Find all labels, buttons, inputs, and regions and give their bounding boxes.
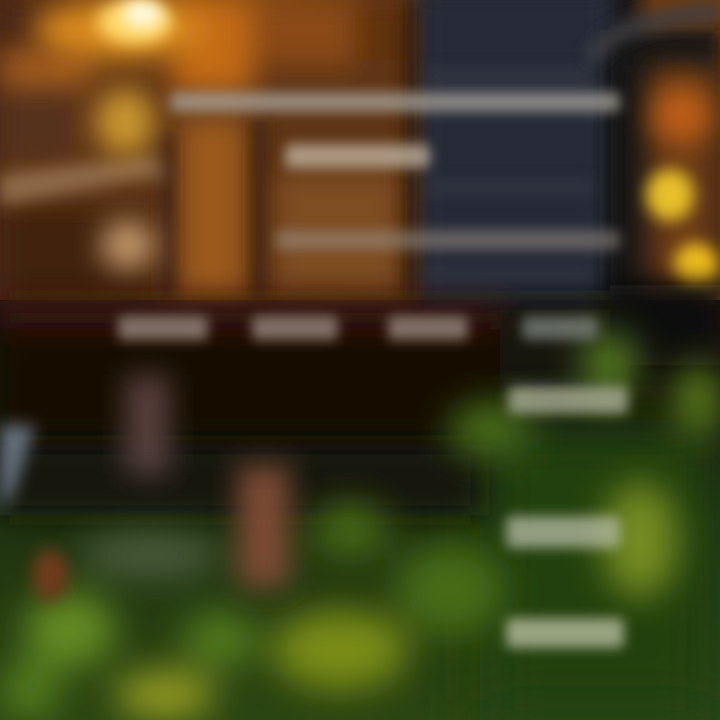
panel: dark porch band (0, 285, 720, 440)
panel: garden foliage (0, 331, 720, 720)
panel: dark blue siding (424, 0, 604, 310)
text block: blurred subheading (275, 230, 620, 250)
icon: posts and figures (0, 375, 290, 601)
icon: sun glare (35, 0, 205, 271)
panel: wooden cabin wall (0, 0, 420, 310)
panel: hanging lantern (592, 12, 720, 300)
title: blurred heading text (170, 92, 620, 168)
text block: blurred right column labels (506, 386, 628, 648)
text block: blurred row of four labels (118, 316, 598, 340)
